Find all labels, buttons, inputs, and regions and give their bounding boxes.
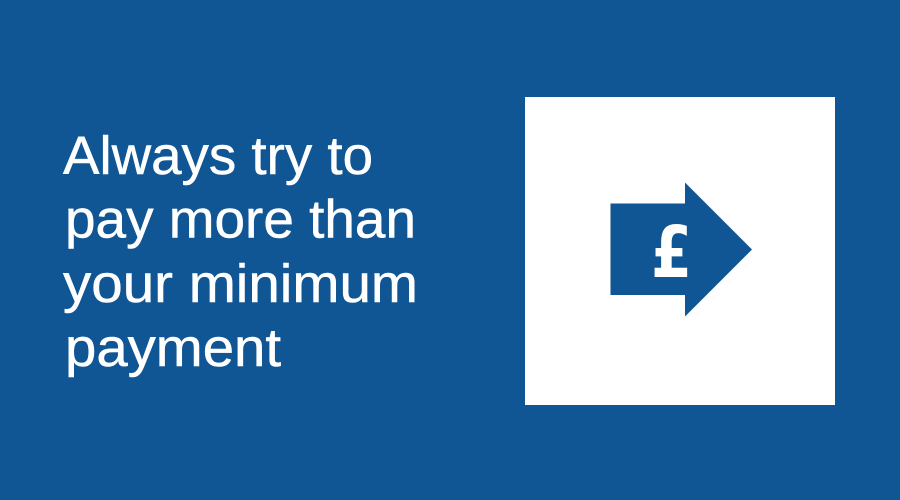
arrow (610, 182, 752, 316)
panel: white icon square (525, 97, 835, 405)
heading: pay more than your minimum: pay more than (65, 190, 416, 250)
heading: pay more than your minimum: payment (65, 318, 281, 378)
pound sign: £ (651, 211, 692, 294)
heading: pay more than your minimum: Always try to (63, 126, 373, 186)
heading: pay more than your minimum (63, 126, 418, 378)
heading: pay more than your minimum: your minimum (63, 254, 418, 314)
icon: arrow with pound sign (610, 182, 752, 316)
